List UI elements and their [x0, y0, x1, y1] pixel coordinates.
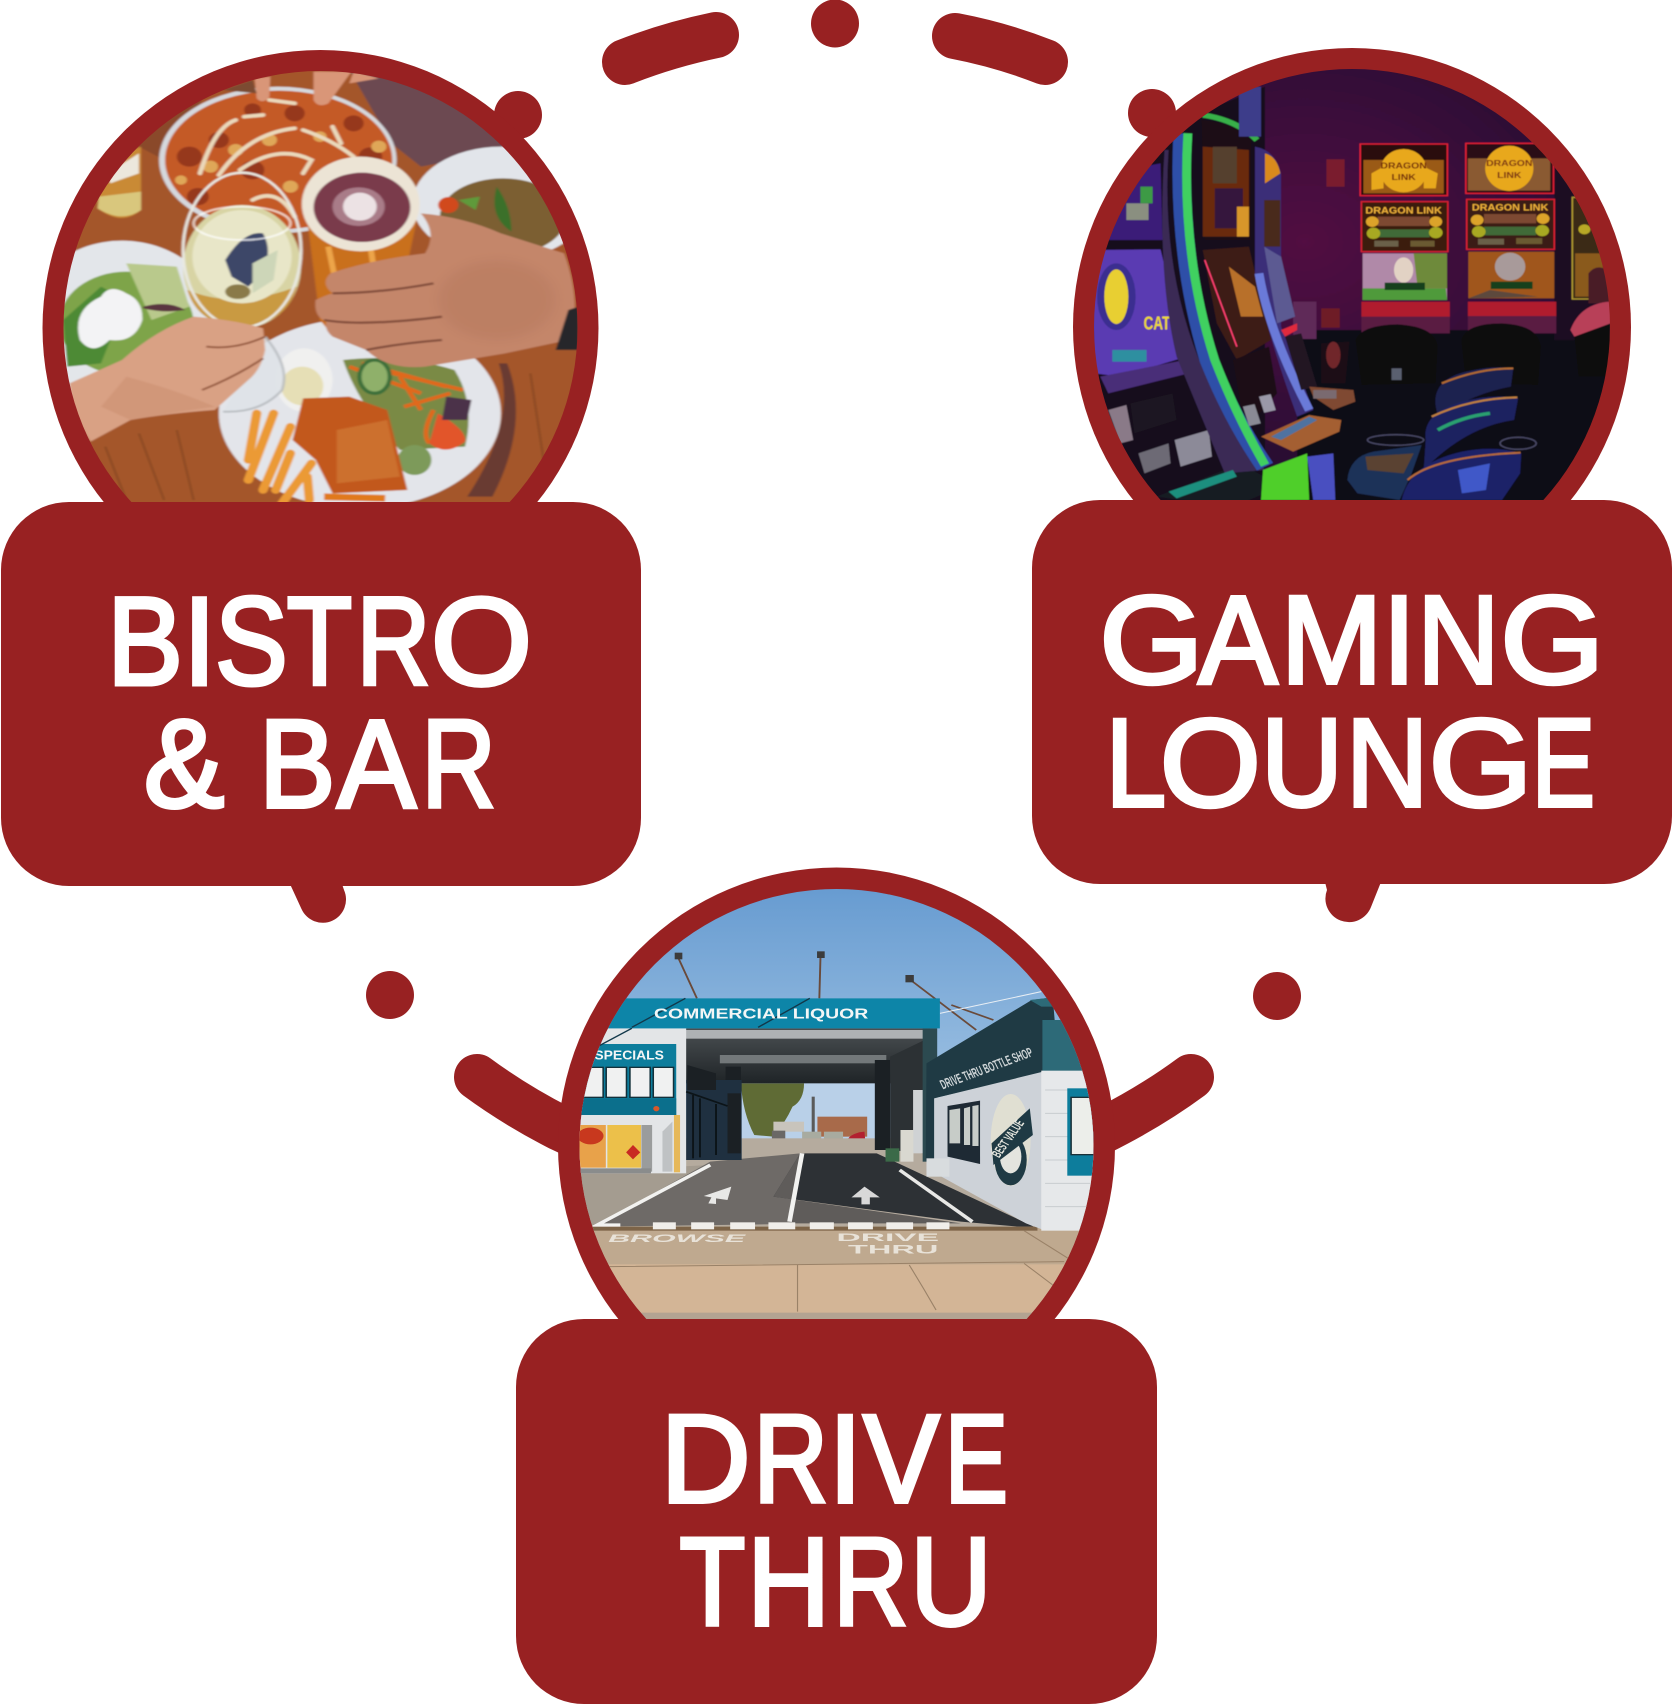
- heading: bistro and bar: B: [107, 573, 183, 712]
- connector: dot on bistro circle: [494, 91, 542, 139]
- connector: lower left dot: [366, 971, 414, 1019]
- wine glass: [183, 205, 301, 328]
- lamp posts: [678, 957, 993, 1030]
- left machines: [1098, 86, 1266, 500]
- heading: gaming lounge: O: [1160, 694, 1261, 833]
- connector: top right dash: [955, 36, 1045, 62]
- heading: gaming lounge: G: [1429, 694, 1533, 833]
- stools: [1355, 324, 1438, 385]
- heading: bistro and bar: B: [259, 695, 335, 834]
- road markings: [597, 1165, 710, 1225]
- consoles: [1309, 387, 1355, 410]
- photo: drive through bottle shop: DRIVE: [837, 1233, 940, 1244]
- heading: drive thru: I: [828, 1390, 862, 1529]
- neon base: [1261, 453, 1309, 500]
- connector: top left dash: [625, 35, 716, 62]
- photo: poker machines in neon light: DRAGON LINK: [1472, 203, 1549, 213]
- photo: drive through bottle shop: COMMERCIAL LIQUOR: [654, 1006, 869, 1022]
- fingers at top: [255, 77, 270, 101]
- panel: bistro and bar: [0, 50, 660, 923]
- window: [948, 1101, 980, 1164]
- heading: bistro and bar: R: [357, 573, 430, 712]
- label box: gaming lounge: [1032, 500, 1672, 922]
- chips: [248, 413, 311, 503]
- heading: drive thru: E: [945, 1390, 1008, 1529]
- heading: drive thru: D: [660, 1390, 751, 1529]
- heading: gaming lounge: E: [1532, 694, 1595, 833]
- left plate: [64, 239, 208, 396]
- photo: poker machines in neon light: [1094, 69, 1610, 500]
- heading: gaming lounge: L: [1106, 694, 1166, 833]
- heading: gaming lounge: A: [1198, 571, 1278, 710]
- connector: lower right dot: [1253, 972, 1301, 1020]
- beer glass: [307, 220, 417, 330]
- photo: poker machines in neon light: DRAGON: [1380, 161, 1427, 171]
- heading: gaming lounge: U: [1261, 694, 1343, 833]
- panel: drive thru: [516, 868, 1157, 1704]
- heading: drive thru: T: [680, 1513, 745, 1652]
- connector: tab under bistro box: [290, 884, 346, 923]
- heading: gaming lounge: G: [1500, 571, 1604, 710]
- heading: bistro and bar: T: [287, 573, 352, 712]
- heading: bistro and bar: O: [431, 573, 532, 712]
- photo: poker machines in neon light: DRAGON: [1486, 159, 1533, 169]
- photo: poker machines in neon light: CAT: [1144, 313, 1170, 334]
- photo: drive through bottle shop: [540, 880, 1140, 1340]
- heading: bistro and bar: &: [144, 695, 224, 834]
- ground: [540, 1138, 1140, 1340]
- machine body with green neon strip: [1162, 150, 1265, 473]
- pizza plate: [159, 87, 397, 233]
- best value logo: BEST VALUE: [988, 1117, 1027, 1160]
- photo: drive through bottle shop: THRU: [848, 1242, 938, 1256]
- fascia: [607, 998, 940, 1028]
- canopy: [685, 1028, 930, 1083]
- heading: drive thru: V: [863, 1390, 939, 1529]
- heading: gaming lounge: N: [1346, 694, 1428, 833]
- photo: drive through bottle shop: BROWSE: [608, 1232, 747, 1245]
- photo: drive through bottle shop: DRIVE THRU BOTTLE SHOP: [938, 1045, 1036, 1093]
- machine A: [1360, 144, 1447, 196]
- heading: drive thru: H: [747, 1513, 830, 1652]
- far view: [739, 1080, 877, 1143]
- label box: drive thru: [516, 1319, 1157, 1704]
- heading: drive thru: R: [754, 1390, 828, 1529]
- heading: bistro and bar: R: [422, 695, 496, 834]
- heading: drive thru: R: [833, 1513, 908, 1652]
- photo: poker machines in neon light: LINK: [1391, 173, 1416, 183]
- photo: food and drinks on a table: [64, 71, 578, 502]
- label box: bistro and bar: [1, 502, 641, 923]
- left building: [578, 1028, 686, 1173]
- machine C and patron: [1570, 196, 1599, 301]
- heading: gaming lounge: G: [1099, 571, 1204, 710]
- heading: gaming lounge: M: [1281, 571, 1382, 710]
- glass shopfront: [686, 1080, 742, 1160]
- heading: bistro and bar: A: [337, 695, 416, 834]
- photo ring: bistro: [42, 50, 598, 606]
- right plate: [414, 146, 564, 250]
- best value logo: [988, 1094, 1033, 1186]
- heading: gaming lounge: I: [1383, 571, 1416, 710]
- heading: bistro and bar: S: [215, 573, 288, 712]
- bottom plate: [219, 318, 501, 508]
- connector: top centre dot: [811, 0, 859, 48]
- left hand: [69, 317, 265, 442]
- beer at back: [98, 147, 141, 218]
- connector: tab under gaming box: [1325, 882, 1381, 922]
- photo ring: drive thru: [558, 868, 1115, 1424]
- connector: dot on gaming circle: [1128, 89, 1176, 137]
- heading: gaming lounge: N: [1417, 571, 1499, 710]
- right hand: [315, 213, 575, 367]
- photo: poker machines in neon light: LINK: [1497, 171, 1522, 181]
- right building: [926, 997, 1055, 1167]
- photo: drive through bottle shop: SPECIALS: [594, 1048, 664, 1062]
- connector: lower left arm: [477, 1077, 590, 1142]
- heading: bistro and bar: I: [183, 573, 216, 712]
- machine B: [1466, 143, 1553, 193]
- third machine: [1255, 147, 1313, 417]
- connector: lower right arm: [1080, 1077, 1191, 1142]
- wall signs: [1326, 159, 1345, 187]
- fish: [293, 397, 407, 493]
- photo ring: gaming: [1073, 48, 1631, 606]
- photo: poker machines in neon light: DRAGON LINK: [1365, 206, 1443, 216]
- panel: gaming lounge: [1032, 40, 1672, 922]
- heading: drive thru: U: [910, 1513, 992, 1652]
